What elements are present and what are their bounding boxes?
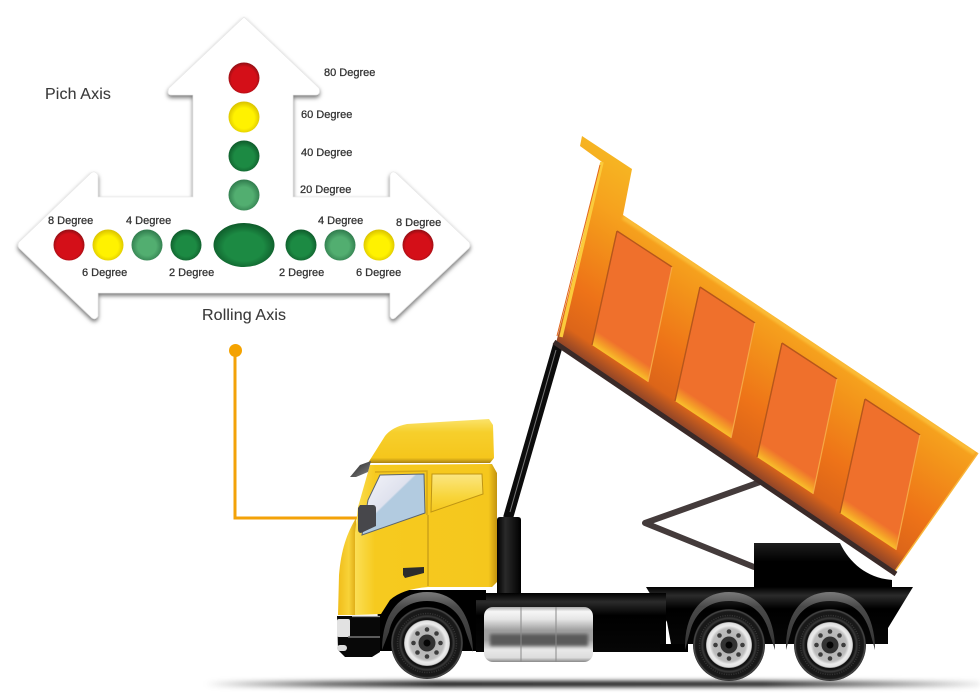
front wheel bbox=[391, 607, 463, 679]
bed panel 1 bbox=[592, 231, 672, 382]
ground shadow bbox=[205, 681, 980, 687]
dump bed bbox=[554, 136, 978, 574]
bottom rail bbox=[554, 342, 896, 574]
pitch degree labels: 80 Degree bbox=[324, 67, 375, 79]
rolling degree labels: 8 Degree bbox=[48, 215, 93, 227]
door line bbox=[427, 515, 429, 586]
pitch degree labels: 60 Degree bbox=[301, 109, 352, 121]
arrow shape bbox=[18, 17, 470, 319]
rolling degree labels: 4 Degree bbox=[318, 215, 363, 227]
scissor arm bbox=[645, 481, 763, 567]
bumper bbox=[337, 616, 380, 657]
rolling degree labels: 8 Degree bbox=[396, 217, 441, 229]
nose bbox=[338, 518, 356, 615]
heading: rolling axis: Rolling Axis bbox=[202, 307, 286, 324]
rolling axis indicator lights bbox=[54, 223, 434, 267]
front fender bbox=[382, 592, 473, 652]
side window bbox=[431, 474, 483, 512]
hydraulic ram bbox=[497, 345, 558, 596]
heading: pitch axis: Pich Axis bbox=[45, 86, 111, 103]
callout connector line bbox=[229, 344, 358, 518]
windshield bbox=[362, 474, 425, 535]
door handle bbox=[403, 567, 424, 578]
cab body bbox=[355, 464, 497, 615]
pitch degree labels: 40 Degree bbox=[301, 147, 352, 159]
rolling degree labels bbox=[48, 215, 441, 279]
rolling degree labels: 2 Degree bbox=[279, 267, 324, 279]
left edge highlight bbox=[561, 162, 602, 337]
fuel tank bbox=[484, 607, 593, 662]
top edge highlight bbox=[623, 217, 975, 453]
right edge highlight bbox=[893, 453, 978, 574]
pitch degree labels bbox=[300, 67, 375, 196]
rolling degree labels: 2 Degree bbox=[169, 267, 214, 279]
rear fender 2 bbox=[786, 592, 875, 650]
dump truck bbox=[337, 136, 978, 681]
roof fairing bbox=[368, 419, 494, 463]
windshield frame bbox=[375, 471, 427, 515]
pitch degree labels: 20 Degree bbox=[300, 184, 351, 196]
rear fender 1 bbox=[685, 592, 775, 650]
bed panel 4 bbox=[840, 399, 920, 550]
bed panel 2 bbox=[675, 287, 755, 438]
bed panel 3 bbox=[757, 343, 837, 494]
chassis bbox=[376, 543, 913, 652]
side mirror bbox=[358, 505, 376, 533]
top mirror bbox=[350, 461, 371, 477]
rolling degree labels: 6 Degree bbox=[356, 267, 401, 279]
rolling degree labels: 6 Degree bbox=[82, 267, 127, 279]
pitch axis indicator lights bbox=[228, 62, 260, 210]
cab bbox=[338, 419, 497, 615]
rolling degree labels: 4 Degree bbox=[126, 215, 171, 227]
rear wheel 1 bbox=[693, 609, 765, 681]
panel: axis arrows bbox=[18, 17, 470, 319]
rear wheel 2 bbox=[794, 609, 866, 681]
